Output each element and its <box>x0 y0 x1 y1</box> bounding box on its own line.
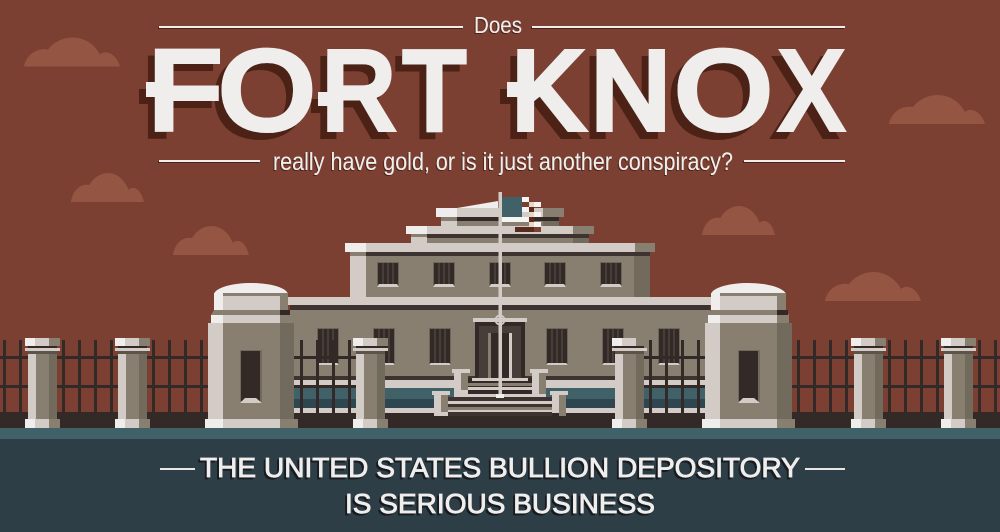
guardhouse: left <box>205 283 298 428</box>
cloud: upper right <box>889 95 985 124</box>
heading: Does: Does <box>474 12 522 38</box>
pillar 5 <box>851 338 886 428</box>
second tier of roof <box>406 226 594 243</box>
heading: FORT KNOX <box>146 30 843 152</box>
cloud: lower right <box>825 272 921 301</box>
lower storey <box>288 297 712 428</box>
pillar 2 <box>115 338 150 428</box>
heading: FORT KNOX: F <box>149 30 221 152</box>
top tier of roof <box>436 201 564 226</box>
upper storey <box>345 243 655 298</box>
upper windows <box>377 262 622 287</box>
title block <box>146 12 845 176</box>
cloud: upper left <box>24 38 120 66</box>
pillar 4 <box>612 338 647 428</box>
front steps <box>432 369 568 416</box>
lower windows <box>317 328 680 365</box>
cloud: lower left <box>173 226 249 255</box>
heading: FORT KNOX: N <box>591 30 670 152</box>
flagpole <box>496 192 504 398</box>
pillar 3 <box>353 338 388 428</box>
cloud: middle right <box>702 206 775 235</box>
entrance door <box>473 318 527 378</box>
banner line 2: IS SERIOUS BUSINESS <box>345 488 655 519</box>
guardhouse window <box>240 350 262 403</box>
clouds <box>24 38 985 301</box>
pillar 6 <box>941 338 976 428</box>
guardhouse window <box>738 350 760 403</box>
heading: FORT KNOX: X <box>780 30 843 152</box>
subtitle: really have gold, or is it just another conspiracy? <box>273 148 733 176</box>
heading: FORT KNOX: K <box>512 30 583 152</box>
building: Fort Knox depository <box>288 192 712 428</box>
banner line 1: THE UNITED STATES BULLION DEPOSITORY <box>200 452 800 483</box>
heading: FORT KNOX: O <box>676 30 772 152</box>
ground strip <box>0 428 1000 439</box>
iron fence <box>0 340 1000 428</box>
guardhouse: right <box>702 283 795 428</box>
pillar 1 <box>25 338 60 428</box>
bottom banner <box>0 439 1000 532</box>
heading: FORT KNOX: R <box>322 30 396 152</box>
heading: FORT KNOX: T <box>403 30 466 152</box>
heading: FORT KNOX: O <box>220 30 314 152</box>
flag <box>502 197 541 232</box>
cloud: middle left <box>71 173 144 202</box>
